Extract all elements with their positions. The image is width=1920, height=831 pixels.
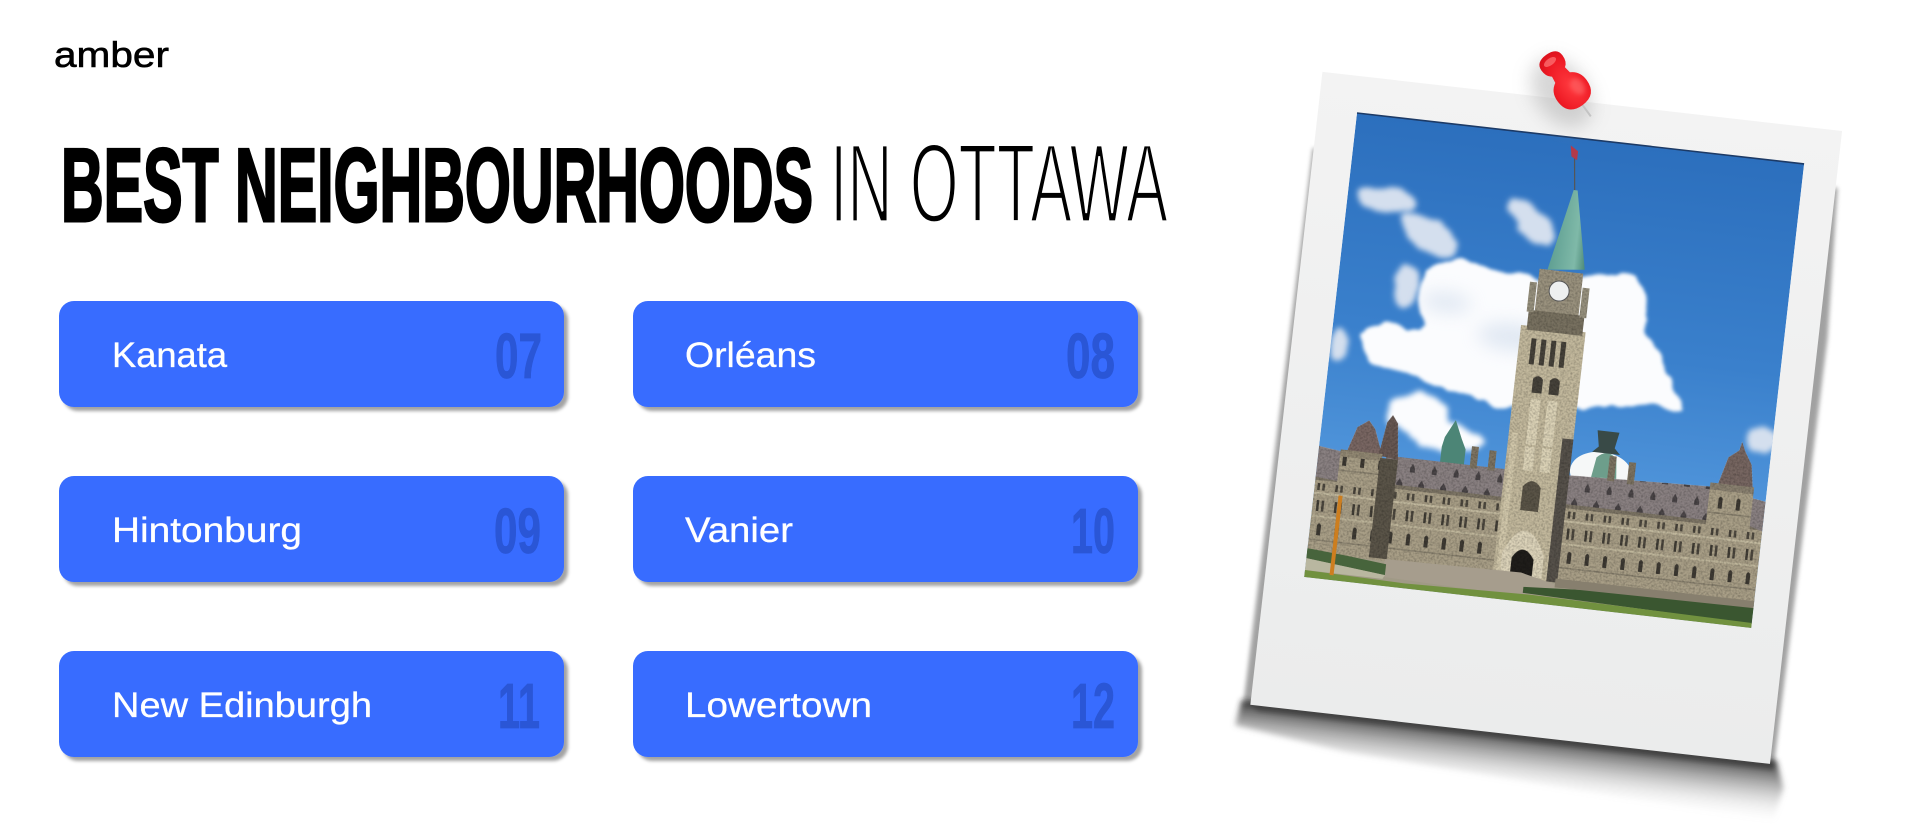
tower spire — [1548, 190, 1585, 270]
card: Kanata 07 — [59, 301, 564, 407]
right wing roof — [1566, 475, 1710, 520]
left pavilion — [1316, 415, 1398, 559]
tower doorway — [1500, 530, 1544, 579]
far cupola — [1440, 420, 1466, 464]
card: Lowertown 12: 12 — [1071, 670, 1115, 742]
tower belfry windows — [1520, 338, 1566, 512]
card: Lowertown 12: Lowertown — [685, 686, 872, 725]
card: Vanier 10 — [633, 476, 1138, 582]
card: New Edinburgh 11: 11 — [498, 670, 540, 742]
card: Kanata 07: Kanata — [112, 336, 228, 375]
left wing roof — [1386, 456, 1505, 497]
tower clock stage — [1534, 268, 1584, 316]
polaroid photo frame — [1231, 70, 1858, 821]
card: Kanata 07: 07 — [495, 320, 542, 392]
tower shaft — [1493, 325, 1586, 583]
chimneys — [1470, 446, 1636, 485]
card: Vanier 10: Vanier — [685, 511, 793, 550]
card: New Edinburgh 11 — [59, 651, 564, 757]
card: Vanier 10: 10 — [1071, 495, 1115, 567]
photo top inner shadow — [1357, 113, 1804, 164]
card: New Edinburgh 11: New Edinburgh — [112, 686, 372, 725]
plaza and steps — [1384, 559, 1546, 582]
card: Orléans 08: 08 — [1066, 320, 1115, 392]
card: Hintonburg 09: 09 — [494, 495, 541, 567]
pin body — [1532, 44, 1597, 116]
ground backing — [1304, 548, 1755, 628]
right pavilion — [1698, 439, 1772, 601]
central dome — [1570, 430, 1629, 480]
pin shadow — [1518, 47, 1605, 139]
title — [61, 121, 1168, 246]
polaroid paper — [1250, 72, 1842, 764]
Peace Tower — [1493, 267, 1592, 583]
tower clock — [1548, 280, 1570, 302]
hedges — [1305, 548, 1755, 624]
photograph: Parliament Hill — [1303, 113, 1810, 629]
card: Orléans 08 — [633, 301, 1138, 407]
polaroid bottom shadow — [1231, 699, 1786, 821]
card: Hintonburg 09 — [59, 476, 564, 582]
parliament building — [1307, 268, 1766, 602]
tower panel windows — [1523, 399, 1558, 473]
clouds — [1329, 182, 1774, 458]
push pin — [1517, 44, 1607, 139]
title: bold part: BEST NEIGHBOURHOODS — [61, 128, 813, 244]
card: Hintonburg 09: Hintonburg — [112, 511, 302, 550]
card: Orléans 08: Orléans — [685, 336, 816, 375]
logo: amber: amber — [54, 34, 169, 75]
path and lawn — [1305, 558, 1386, 579]
card: Lowertown 12 — [633, 651, 1138, 757]
pin highlights — [1542, 55, 1558, 69]
wing walls — [1307, 476, 1763, 603]
polaroid side shadow — [1243, 128, 1845, 771]
orange pole — [1330, 495, 1343, 575]
mast and flag — [1570, 146, 1578, 190]
title: light part: IN OTTAWA — [830, 121, 1168, 246]
pin needle — [1581, 103, 1591, 116]
